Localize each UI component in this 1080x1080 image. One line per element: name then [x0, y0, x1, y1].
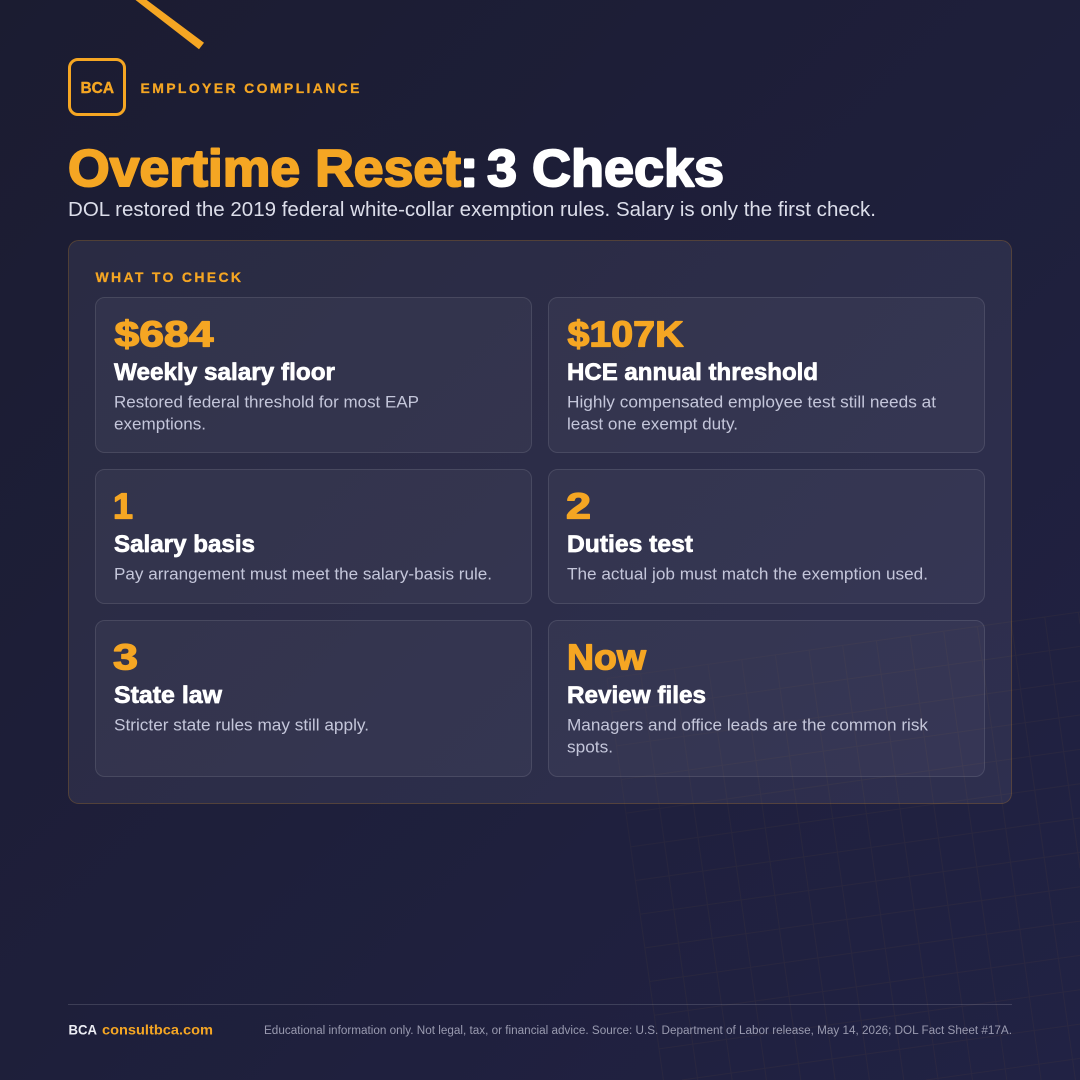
title [68, 140, 724, 198]
card: review files: Now [567, 637, 647, 678]
card: $107K: HCE annual threshold [567, 359, 818, 386]
card: review files: spots. [567, 738, 613, 756]
title: 3 Checks [487, 140, 724, 198]
card: duties test: 2 [566, 486, 591, 527]
logo badge: BCA [80, 80, 114, 97]
logo badge [70, 60, 124, 114]
card: $684 [96, 298, 532, 452]
card: salary basis: Pay arrangement must meet the salary-basis rule. [114, 565, 492, 584]
footer brand: consultbca.com [102, 1022, 213, 1038]
card: $684: $684 [114, 314, 214, 355]
card: duties test: Duties test [567, 531, 693, 558]
card: review files [548, 620, 984, 776]
card: $107K [548, 298, 984, 452]
header: logo and eyebrow [70, 60, 360, 114]
card: review files: Review files [567, 682, 706, 709]
card: state law: Stricter state rules may still apply. [114, 716, 369, 735]
title: Overtime Reset [68, 140, 461, 198]
panel heading: WHAT TO CHECK [96, 269, 241, 285]
card: $684: exemptions. [114, 414, 206, 434]
card: salary basis: Salary basis [114, 531, 255, 558]
card: $107K: least one exempt duty. [567, 414, 738, 434]
title: : [460, 140, 478, 198]
card: state law [96, 620, 532, 776]
card: $107K: Highly compensated employee test still needs at [567, 393, 936, 412]
eyebrow label: EMPLOYER COMPLIANCE [140, 80, 360, 96]
panel: what to check [68, 240, 1012, 804]
card: review files: Managers and office leads are the common risk [567, 716, 929, 735]
subtitle: DOL restored the 2019 federal white-collar exemption rules. Salary is only the first check. [68, 198, 876, 221]
footer brand: BCA [68, 1022, 97, 1038]
card: $107K: $107K [568, 314, 684, 355]
card: state law: 3 [113, 637, 138, 678]
card: salary basis: 1 [113, 486, 133, 527]
card: $684: Restored federal threshold for most EAP [114, 393, 419, 412]
footer [68, 1004, 1012, 1038]
card: $684: Weekly salary floor [114, 359, 335, 386]
card: duties test: The actual job must match the exemption used. [567, 565, 928, 584]
card: salary basis [96, 470, 532, 604]
card: duties test [548, 470, 984, 604]
card: state law: State law [114, 682, 222, 709]
accent diagonal stroke [136, 0, 204, 49]
disclaimer: Educational information only. Not legal, tax, or financial advice. Source: U.S. Department of Labor release, May 14, 2026; DOL Fact Sheet #17A. [264, 1025, 1012, 1037]
